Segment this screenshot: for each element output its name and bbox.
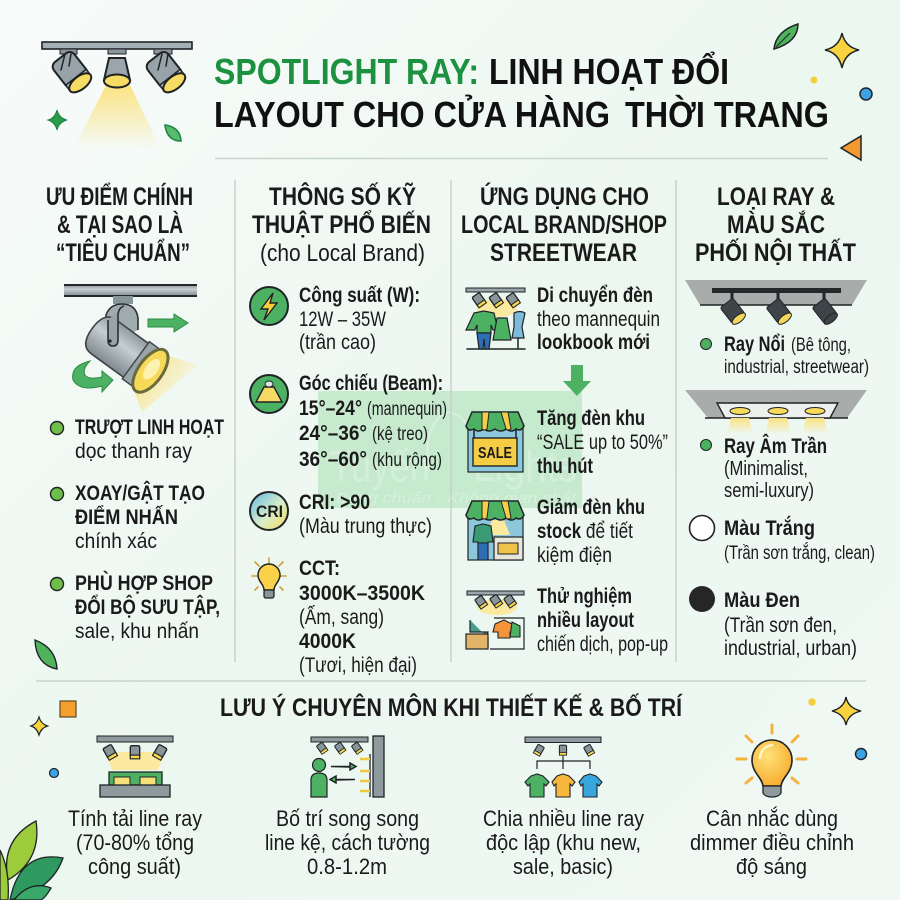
- heading: column 2: THÔNG SỐ KỸ: [269, 181, 416, 211]
- note: parallel layout: [265, 736, 430, 879]
- rail type: recessed: Ray Âm Trần: [724, 434, 827, 458]
- icon: rail with three shirts: [525, 737, 602, 797]
- icon: rail over bed: [97, 736, 173, 797]
- spec: power: Công suất (W):: [299, 284, 420, 307]
- note: dimmer: Cân nhắc dùng: [706, 806, 838, 831]
- decorations: bottom right shapes: [808, 697, 866, 760]
- heading: design notes: LƯU Ý CHUYÊN MÔN KHI THIẾT KẾ & BỐ TRÍ: [220, 692, 683, 722]
- note: dimmer: độ sáng: [736, 854, 807, 879]
- use case: test layouts: chiến dịch, pop-up: [537, 632, 668, 656]
- use case: sale area: Tăng đèn khu: [537, 407, 645, 430]
- use case: test layouts: Thử nghiệm: [537, 585, 632, 608]
- use case: sale area: thu hút: [537, 455, 593, 478]
- colour: white: [690, 516, 875, 564]
- icon: leaf left: [35, 640, 57, 669]
- rail type: recessed: [685, 390, 867, 502]
- title: THỜI TRANG: [625, 93, 829, 135]
- spec: CCT: (Tươi, hiện đại): [299, 653, 417, 677]
- use case: test layouts: nhiều layout: [537, 609, 634, 632]
- bullet: suitable for shops: PHÙ HỢP SHOP: [75, 571, 213, 595]
- title: LINH HOẠT ĐỔI: [489, 49, 729, 92]
- note: independent lines: độc lập (khu new,: [486, 830, 641, 855]
- use case: reduce stock lighting: [466, 496, 645, 567]
- spec: power: [250, 284, 420, 354]
- spec: power: (trần cao): [299, 330, 376, 354]
- arrow: down: [563, 365, 591, 396]
- icon: surface rail ceiling: [685, 280, 867, 326]
- watermark: Tuyến: [330, 442, 430, 491]
- bullet: slide along rail: dọc thanh ray: [75, 439, 192, 463]
- icon: sale storefront: SALE: [478, 445, 512, 462]
- use case: reduce stock lighting: kiệm điện: [537, 543, 612, 567]
- spec: CRI: CRI: >90: [299, 491, 370, 514]
- note: load calculation: [68, 736, 203, 879]
- icon: three track spotlights header: [42, 42, 192, 148]
- heading: column 2: THUẬT PHỔ BIẾN: [252, 209, 431, 239]
- icon: sale storefront: [466, 412, 524, 472]
- icon: green sparkle: [48, 110, 67, 130]
- note: dimmer: [690, 725, 854, 879]
- use case: move lights: lookbook mới: [537, 331, 650, 354]
- spec: CCT: 3000K–3500K: [299, 582, 425, 605]
- use case: move lights: theo mannequin: [537, 307, 660, 331]
- spec: CCT: CCT:: [299, 557, 340, 580]
- rail type: recessed: (Minimalist,: [724, 458, 808, 480]
- spec: beam angle: (kệ treo): [372, 424, 428, 445]
- watermark: Bóng chuẩn - Không gian chất: [336, 490, 577, 507]
- rail type: surface mounted: (Bê tông,: [791, 335, 851, 356]
- note: parallel layout: 0.8-1.2m: [307, 854, 387, 879]
- icon: glowing bulb: [737, 725, 806, 797]
- colour: black: [689, 586, 857, 660]
- note: independent lines: Chia nhiều line ray: [483, 806, 645, 831]
- bullet: suitable for shops: sale, khu nhấn: [75, 619, 199, 643]
- use case: reduce stock lighting: stock để tiết: [537, 519, 633, 543]
- bullet: slide along rail: TRƯỢT LINH HOẠT: [75, 416, 224, 439]
- watermark: [318, 391, 582, 508]
- note: parallel layout: line kệ, cách tường: [265, 830, 430, 855]
- use case: test layouts: [466, 585, 668, 656]
- spec: CCT: (Ấm, sang): [299, 604, 384, 629]
- icon: person, arrows and wall shelves: [311, 736, 384, 797]
- note: independent lines: [483, 737, 645, 879]
- title: SPOTLIGHT RAY:: [214, 51, 479, 92]
- icon: rotating spotlight on rail: [64, 285, 198, 412]
- use case: sale area: [466, 407, 668, 478]
- heading: column 1: “TIÊU CHUẨN”: [56, 237, 190, 267]
- watermark: Lights: [473, 442, 577, 491]
- decorations: top right shapes: [774, 24, 872, 160]
- title: LAYOUT CHO CỬA HÀNG: [214, 93, 610, 135]
- heading: column 4: LOẠI RAY &: [717, 183, 835, 211]
- use case: reduce stock lighting: Giảm đèn khu: [537, 496, 645, 519]
- note: load calculation: (70-80% tổng: [76, 830, 194, 855]
- icon: plant bottom left: [0, 821, 63, 900]
- rail type: surface mounted: [685, 280, 869, 378]
- bullet: suitable for shops: ĐỔI BỘ SƯU TẬP,: [75, 595, 220, 619]
- use case: sale area: “SALE up to 50%”: [537, 430, 668, 454]
- title: [214, 49, 829, 135]
- note: load calculation: công suất): [88, 854, 181, 879]
- spec: CRI: (Màu trung thực): [299, 514, 432, 538]
- spec: CCT: 4000K: [299, 630, 356, 653]
- bullet: rotate and tilt: [50, 481, 205, 553]
- heading: column 1: [46, 182, 193, 267]
- rail type: recessed: semi-luxury): [724, 480, 814, 502]
- bullet: suitable for shops: [50, 571, 220, 643]
- spec: CRI: [250, 491, 432, 538]
- heading: column 1: ƯU ĐIỂM CHÍNH: [46, 182, 193, 211]
- heading: column 3: [461, 181, 667, 267]
- spec: beam angle: Góc chiếu (Beam):: [299, 372, 443, 395]
- spec: beam angle: 15°–24°: [299, 397, 362, 420]
- heading: column 2: (cho Local Brand): [260, 240, 425, 267]
- heading: column 3: LOCAL BRAND/SHOP: [461, 211, 667, 239]
- spec: beam angle: (khu rộng): [372, 450, 442, 471]
- note: load calculation: Tính tải line ray: [68, 806, 203, 831]
- spec: power: 12W – 35W: [299, 307, 387, 331]
- bullet: rotate and tilt: chính xác: [75, 529, 157, 553]
- use case: move lights: [466, 284, 660, 354]
- note: independent lines: sale, basic): [513, 854, 613, 879]
- note: parallel layout: Bố trí song song: [276, 806, 419, 831]
- icon: small leaf: [165, 125, 181, 141]
- spec: beam angle: (mannequin): [367, 399, 447, 420]
- colour: white: Màu Trắng: [724, 516, 815, 540]
- heading: column 2: [252, 181, 431, 267]
- heading: column 4: MÀU SẮC: [727, 209, 825, 239]
- spec: CRI: CRI: [256, 502, 283, 521]
- bullet: rotate and tilt: XOAY/GẬT TẠO: [75, 481, 205, 505]
- spec: beam angle: 24°–36°: [299, 422, 367, 445]
- decorations: bottom left shapes: [31, 701, 76, 778]
- spec: beam angle: [250, 372, 447, 471]
- use case: move lights: Di chuyển đèn: [537, 284, 653, 307]
- colour: black: industrial, urban): [724, 636, 857, 660]
- rail type: surface mounted: Ray Nổi: [724, 333, 785, 356]
- icon: recessed rail ceiling: [685, 390, 867, 434]
- icon: rail, counter and clothes: [466, 591, 524, 649]
- heading: column 3: STREETWEAR: [490, 239, 637, 267]
- heading: column 4: [695, 183, 856, 267]
- spec: beam angle: 36°–60°: [299, 448, 367, 471]
- note: dimmer: dimmer điều chỉnh: [690, 830, 854, 855]
- heading: column 3: ỨNG DỤNG CHO: [480, 181, 649, 211]
- colour: black: Màu Đen: [724, 589, 800, 612]
- icon: stock storefront: [466, 501, 524, 560]
- heading: column 1: & TẠI SAO LÀ: [57, 210, 183, 239]
- bullet: rotate and tilt: ĐIỂM NHẤN: [75, 506, 178, 529]
- icon: rail with clothes: [466, 288, 525, 349]
- bullet: slide along rail: [50, 416, 224, 463]
- colour: black: (Trần sơn đen,: [724, 613, 837, 637]
- spec: CCT: [252, 557, 425, 677]
- heading: column 4: PHỐI NỘI THẤT: [695, 237, 856, 267]
